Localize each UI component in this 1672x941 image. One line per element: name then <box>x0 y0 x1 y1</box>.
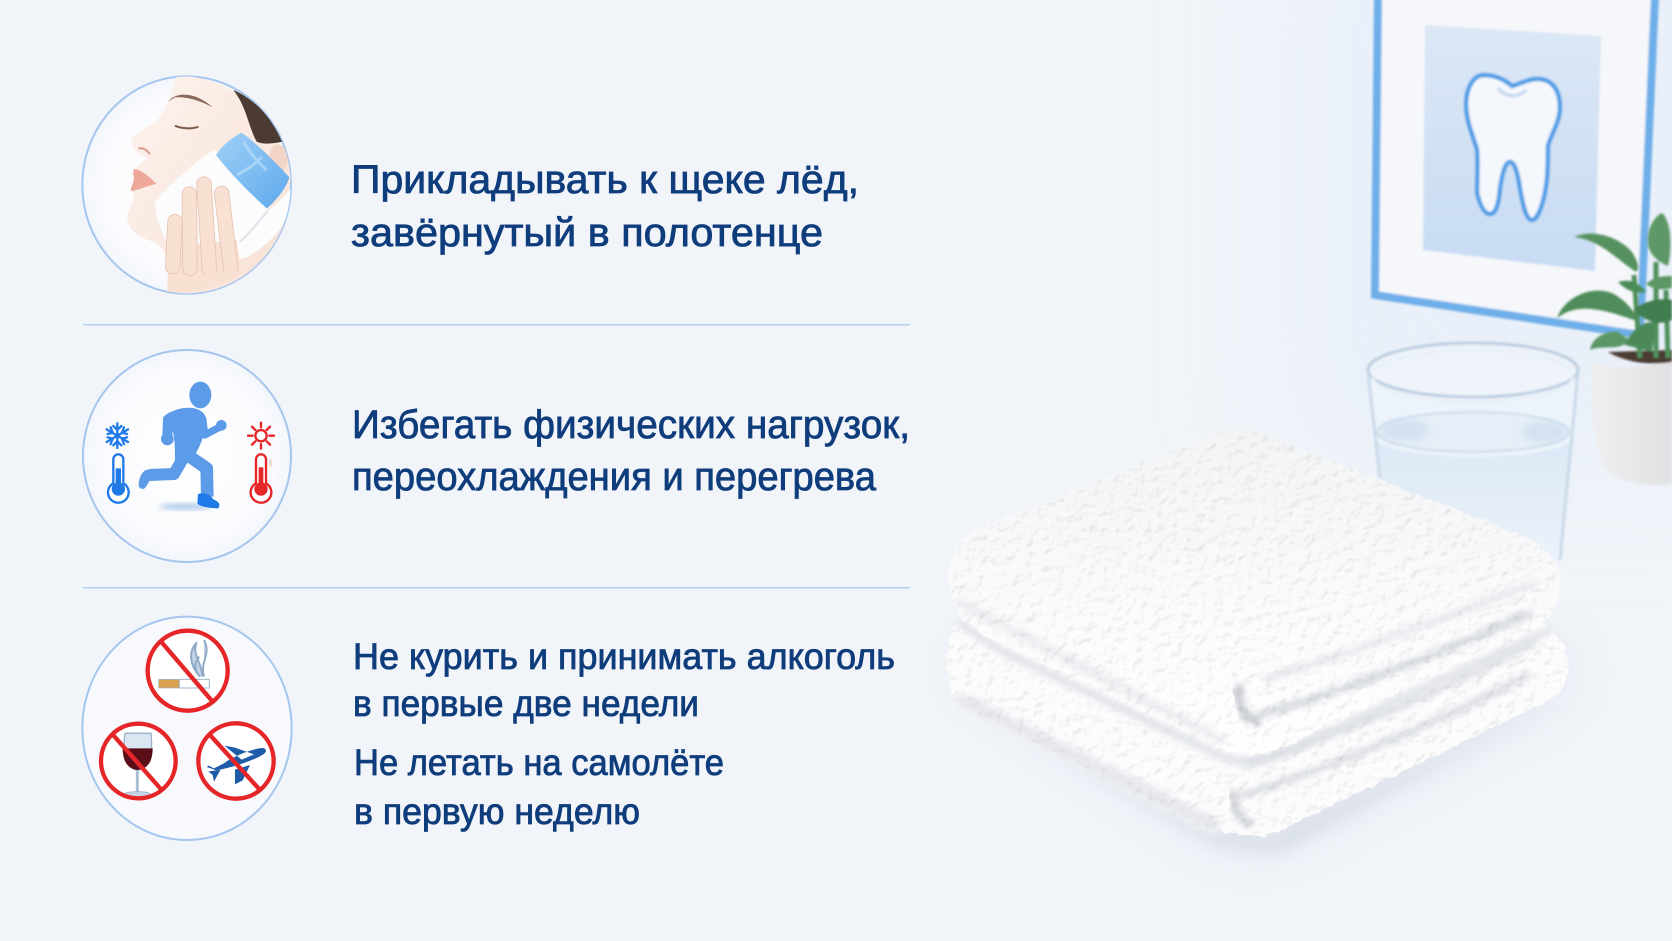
water glass <box>1368 343 1578 560</box>
runner <box>139 382 227 497</box>
hand <box>167 240 242 292</box>
item 1 text: Прикладывать к щеке лёд, <box>351 158 859 202</box>
item 2 text <box>352 403 910 499</box>
contact shadow between towels <box>958 622 1550 761</box>
plant in pot <box>1557 213 1672 485</box>
cold thermometer <box>108 454 129 503</box>
towel wrap <box>155 149 292 259</box>
item 1 text <box>351 158 859 255</box>
face <box>127 75 293 297</box>
item 3 text <box>353 636 895 832</box>
item 3 text: Не курить и принимать алкоголь <box>353 636 895 677</box>
item 3 text: в первые две недели <box>353 683 699 724</box>
no alcohol <box>101 724 176 798</box>
item 1 icon: ice pack on cheek <box>82 75 293 297</box>
item 3 icon: prohibitions <box>82 617 292 840</box>
leaves <box>1557 213 1672 358</box>
stack of folded towels <box>947 428 1568 836</box>
lower towel <box>947 620 1568 836</box>
item 1 text: завёрнутый в полотенце <box>351 211 823 255</box>
separators <box>83 324 910 326</box>
ice pack <box>216 133 289 208</box>
hair <box>233 90 283 144</box>
item 3 text: Не летать на самолёте <box>354 742 724 783</box>
hot thermometer <box>251 454 272 503</box>
framed tooth picture <box>1375 0 1655 338</box>
icon: tooth <box>1466 75 1560 220</box>
no flying <box>198 723 274 799</box>
snowflake <box>107 423 128 448</box>
item 2 icon: runner and thermometers <box>83 350 291 562</box>
towel shadow <box>955 640 1570 852</box>
no smoking <box>148 631 228 711</box>
item 2 text: переохлаждения и перегрева <box>352 455 877 499</box>
item 3 text: в первую неделю <box>354 791 640 832</box>
item 2 text: Избегать физических нагрузок, <box>352 403 910 447</box>
upper towel <box>948 428 1560 755</box>
pot <box>1591 360 1672 485</box>
sun <box>248 423 274 449</box>
